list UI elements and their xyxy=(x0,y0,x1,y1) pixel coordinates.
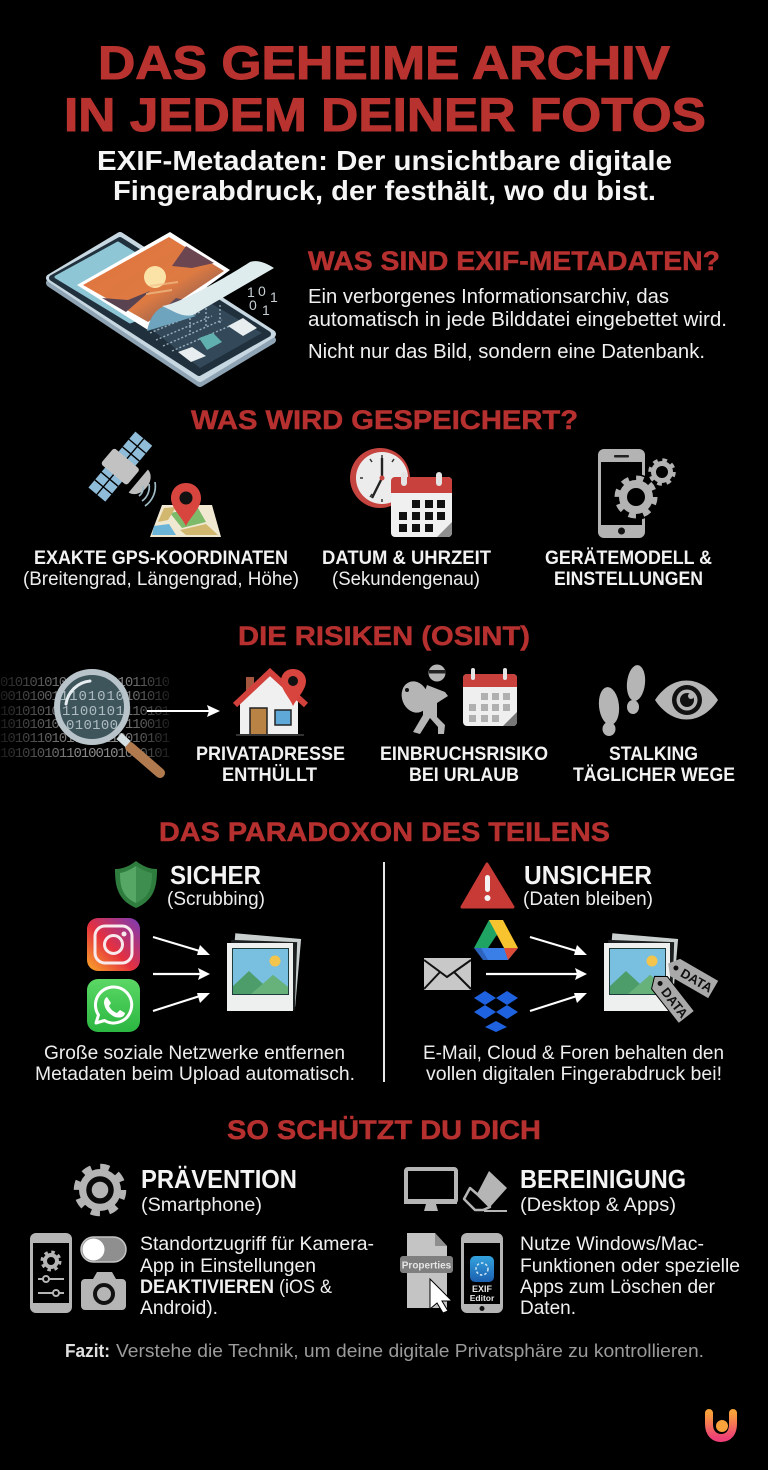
binary digits: 0 xyxy=(249,297,257,313)
binary digits: 1 xyxy=(262,302,270,318)
heading: WAS SIND EXIF-METADATEN? xyxy=(308,246,720,276)
text xyxy=(140,1233,374,1319)
icon: file with properties xyxy=(400,1233,453,1313)
label: (Breitengrad, Längengrad, Höhe) xyxy=(23,568,299,590)
panel: was sind exif-metadaten xyxy=(50,232,727,383)
metadata documents on phone screen xyxy=(178,318,257,362)
icon: eye xyxy=(655,680,718,720)
title: IN JEDEM DEINER FOTOS xyxy=(64,88,706,141)
icon: magnifier: 1101010 xyxy=(60,689,124,705)
text: Standortzugriff für Kamera- xyxy=(140,1233,374,1255)
icon: dropbox xyxy=(474,991,518,1032)
binary digits: 0 xyxy=(258,283,266,299)
label xyxy=(23,547,299,590)
icon: exif editor phone: EXIF xyxy=(472,1284,492,1294)
unsicher heading: (Daten bleiben) xyxy=(523,888,653,910)
panel: risk burglary xyxy=(380,664,548,786)
unsicher heading: UNSICHER xyxy=(524,860,652,890)
description: automatisch in jede Bilddatei eingebettet wird. xyxy=(308,308,727,331)
illustration: phone with peeling photo xyxy=(50,232,278,383)
label: STALKING xyxy=(609,743,698,765)
icon: file with properties: Properties xyxy=(402,1260,452,1272)
label xyxy=(322,547,491,590)
label: GERÄTEMODELL & xyxy=(545,546,712,569)
praevention heading: (Smartphone) xyxy=(141,1194,262,1216)
label: (Sekundengenau) xyxy=(332,568,480,590)
text xyxy=(520,1233,740,1319)
binary background: 10101101010010110010101 xyxy=(0,731,170,747)
text: Apps zum Löschen der xyxy=(520,1276,715,1298)
icon: toggle xyxy=(81,1237,126,1262)
description: Ein verborgenes Informationsarchiv, das xyxy=(308,285,669,308)
sicher heading xyxy=(167,860,265,910)
sunset photo xyxy=(77,232,230,330)
icon: map pin on map xyxy=(150,483,221,537)
text: Funktionen oder spezielle xyxy=(520,1255,740,1277)
icon: warning xyxy=(462,864,513,907)
icon: satellite xyxy=(84,428,169,516)
icon: house with pin xyxy=(235,669,306,735)
icon: clock xyxy=(350,448,410,508)
heading: was wird gespeichert: WAS WIRD GESPEICHERT? xyxy=(191,405,578,435)
logo xyxy=(709,1413,733,1438)
icon: magnifier: 010100 xyxy=(66,718,118,734)
label: PRIVATADRESSE xyxy=(196,743,345,765)
panel: geraet xyxy=(545,449,712,590)
icon: footprints xyxy=(597,664,647,736)
binary background: 01010101010101101011010 xyxy=(0,675,170,691)
binary background: 00101001011010101101010 xyxy=(0,689,170,705)
subtitle xyxy=(97,145,672,206)
label xyxy=(380,743,548,786)
unsicher heading xyxy=(523,860,653,910)
text: Große soziale Netzwerke entfernen xyxy=(44,1042,345,1064)
arrows xyxy=(153,937,210,1011)
arrows xyxy=(486,937,587,1011)
icon: photo with data tags: DATA xyxy=(658,985,691,1021)
label xyxy=(545,546,712,590)
binary digits: 1 xyxy=(247,284,255,300)
label: EXAKTE GPS-KOORDINATEN xyxy=(34,547,288,569)
panel: datum xyxy=(322,448,491,590)
bereinigung heading xyxy=(520,1164,686,1216)
text: E-Mail, Cloud & Foren behalten den xyxy=(423,1042,724,1064)
icon: camera xyxy=(81,1272,126,1310)
title: DAS GEHEIME ARCHIV xyxy=(98,36,671,89)
panel: bereinigung xyxy=(400,1164,740,1319)
icon: phone settings xyxy=(30,1233,72,1313)
text: Android). xyxy=(140,1297,218,1319)
label: TÄGLICHER WEGE xyxy=(573,763,735,786)
praevention heading: PRÄVENTION xyxy=(141,1164,297,1194)
peeling corner xyxy=(147,306,196,331)
label xyxy=(196,743,345,786)
icon: whatsapp xyxy=(87,979,140,1032)
icon: google drive xyxy=(474,920,518,960)
icon: phone with gears xyxy=(598,449,674,538)
heading: die risiken: DIE RISIKEN (OSINT) xyxy=(238,621,530,651)
subtitle: Fingerabdruck, der festhält, wo du bist. xyxy=(113,175,656,206)
praevention heading xyxy=(141,1164,297,1216)
icon: photo with data tags: DATA xyxy=(678,965,716,996)
icon: calendar grey xyxy=(463,668,517,726)
icon: monitor xyxy=(404,1169,457,1211)
icon: magnifier xyxy=(57,672,160,773)
icon: photo with data tags xyxy=(604,933,718,1023)
icon: exif editor phone: Editor xyxy=(470,1293,495,1303)
subtitle: EXIF-Metadaten: Der unsichtbare digitale xyxy=(97,145,672,176)
label xyxy=(573,743,735,786)
icon: calendar xyxy=(391,472,452,537)
icon: gear xyxy=(76,1166,124,1214)
icon: instagram xyxy=(87,918,140,971)
description xyxy=(308,285,727,363)
icon: burglar xyxy=(397,664,448,734)
sicher heading: SICHER xyxy=(170,860,261,890)
bereinigung heading: BEREINIGUNG xyxy=(520,1164,686,1194)
panel: risk stalking xyxy=(573,664,735,786)
conclusion: Fazit: xyxy=(65,1341,110,1361)
label: EINBRUCHSRISIKO xyxy=(380,743,548,765)
binary background xyxy=(0,672,172,764)
text: App in Einstellungen xyxy=(140,1255,316,1277)
text: Metadaten beim Upload automatisch. xyxy=(35,1063,355,1085)
icon: magnifier: 1100101 xyxy=(62,704,124,720)
panel: risk address xyxy=(0,669,345,786)
binary background: 10101010110100101010101 xyxy=(0,746,170,762)
sicher heading: (Scrubbing) xyxy=(167,888,265,910)
conclusion: Verstehe die Technik, um deine digitale Privatsphäre zu kontrollieren. xyxy=(116,1341,704,1361)
text xyxy=(35,1042,355,1085)
text: vollen digitalen Fingerabdruck bei! xyxy=(426,1063,722,1085)
arrow xyxy=(147,705,220,717)
title xyxy=(64,36,706,141)
text: Daten. xyxy=(520,1297,576,1319)
label: EINSTELLUNGEN xyxy=(554,568,703,590)
panel: sicher xyxy=(35,860,355,1085)
label: BEI URLAUB xyxy=(409,764,519,786)
panel: gps xyxy=(23,428,299,590)
label: DATUM & UHRZEIT xyxy=(322,547,491,569)
icon: eraser xyxy=(464,1171,507,1211)
text: Nutze Windows/Mac- xyxy=(520,1233,704,1255)
heading: paradoxon: DAS PARADOXON DES TEILENS xyxy=(159,817,610,847)
binary background: 10101010010010100110010 xyxy=(0,717,170,733)
text: DEAKTIVIEREN (iOS & xyxy=(140,1276,332,1298)
icon: exif editor phone xyxy=(461,1233,503,1313)
bereinigung heading: (Desktop & Apps) xyxy=(520,1194,676,1216)
heading: so schuetzt du dich: SO SCHÜTZT DU DICH xyxy=(227,1115,541,1145)
binary digits: 1 xyxy=(270,289,278,305)
label: ENTHÜLLT xyxy=(222,763,317,786)
panel: praevention xyxy=(30,1164,374,1319)
icon: photo xyxy=(227,933,301,1011)
text xyxy=(423,1042,724,1085)
panel: unsicher xyxy=(423,860,724,1085)
icon: envelope xyxy=(424,958,471,990)
binary background: 10101010101100101110101 xyxy=(0,704,170,720)
description: Nicht nur das Bild, sondern eine Datenbank. xyxy=(308,340,705,363)
binary digits xyxy=(247,283,278,318)
icon: shield xyxy=(115,861,157,908)
